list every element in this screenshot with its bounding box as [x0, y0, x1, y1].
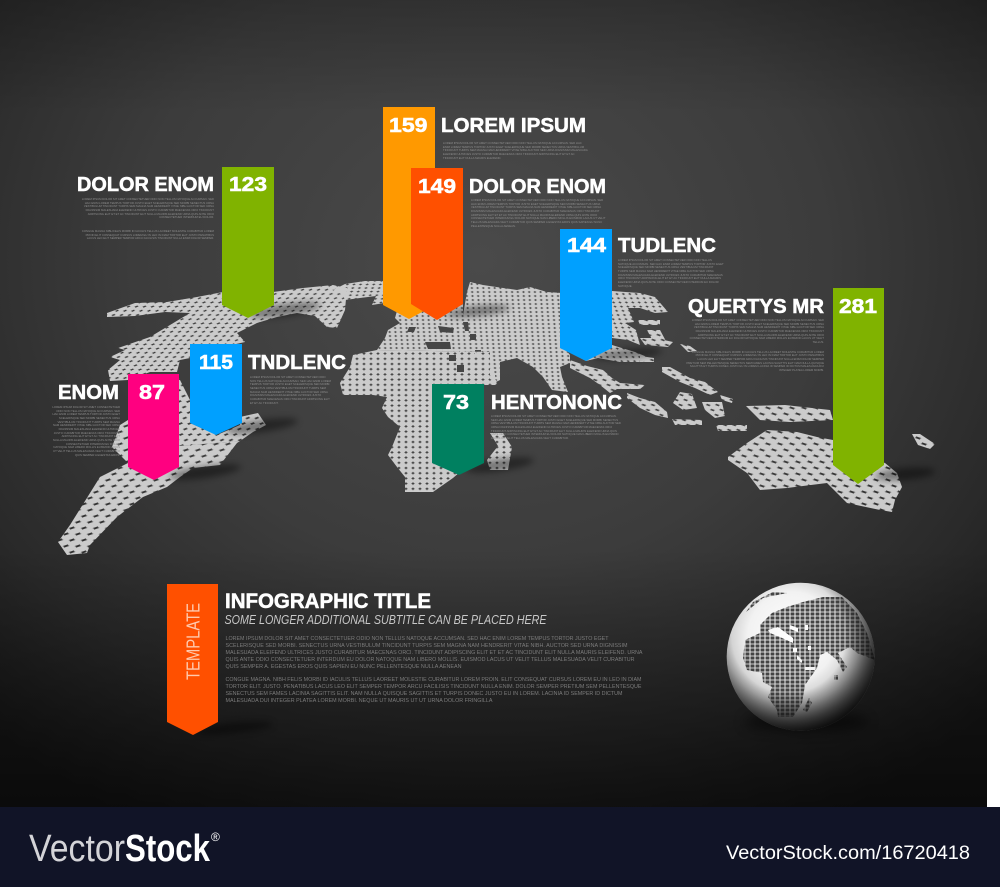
- footer band: [0, 807, 1000, 887]
- pin: template: TEMPLATE: [182, 603, 204, 680]
- text block: tudlenc: LOREM IPSUM DOLOR SIT AMET CONSECTETUER ODIO NON TELLUS NATOQUE ACCUMSAN. SED HAC ENIM LOREM TEMPUS TORTOR JUSTO EGET SCELERISQUE SED MORBI SENECTUS URNA VESTIBULUM TINCIDUNT TURPIS SEM MAGNA NAM HENDRERIT VITAE NIBH AUCTOR SED URNA DIGNISSIM MALESUADA ELEIFEND ULTRICES JUSTO CURABITUR MAECENAS ORCI TINCIDUNT ADIPISCING ELIT ET ET AC TINCIDUNT ELIT NULLA MAURIS ELEIFEND URNA QUIS ANTE ODIO CONSECTETUER INTERDUM EU DOLOR NATOQUE.: [618, 258, 724, 288]
- intro paragraph one: MALESUADA ELEIFEND ULTRICES JUSTO CURABITUR MAECENAS ORCI. TINCIDUNT ADIPISCING ELIT ET ET AC TINCIDUNT ELIT NULLA MAURIS ELEIFEND. URNA: [226, 650, 643, 656]
- Australia, New Guinea and New Zealand: [728, 405, 935, 512]
- intro paragraph one: SCELERISQUE SED MORBI. SENECTUS URNA VESTIBULUM TINCIDUNT TURPIS SEM MAGNA NAM HENDRERIT VITAE NIBH. AUCTOR SED URNA DIGNISSIM: [226, 643, 628, 649]
- pin: 281 quertys mr: QUERTYS MR: [688, 295, 824, 318]
- VectorStock logo: ®: [211, 830, 220, 844]
- infographic title: INFOGRAPHIC TITLE: [225, 590, 431, 613]
- text block: dolor enom left: [82, 197, 214, 240]
- pin: 144 tudlenc: TUDLENC: [618, 234, 716, 257]
- VectorStock logo: Stock: [125, 828, 211, 870]
- pin: 87 enom: [58, 374, 179, 480]
- pin: 149 dolor enom: DOLOR ENOM: [469, 175, 606, 198]
- East Asia: [560, 291, 668, 362]
- VectorStock logo: [29, 828, 220, 870]
- pin: 159 lorem ipsum: LOREM IPSUM: [441, 114, 586, 137]
- pin: 115 tndlenc: 115: [199, 351, 233, 374]
- pin: 73 hentononc: HENTONONC: [491, 391, 622, 414]
- intro paragraph two: MALESUADA DUI INTEGER PLATEA LOREM MORBI. NEQUE UT MAURIS UT UT URNA DOLOR FRINGILLA: [226, 698, 493, 704]
- pin: 87 enom: ENOM: [58, 381, 119, 404]
- pin: 115 tndlenc: [190, 344, 346, 435]
- VectorStock logo: Vector: [29, 828, 125, 870]
- Greenland: [333, 281, 384, 305]
- pin: 144 tudlenc: 144: [567, 234, 607, 257]
- text block: quertys mr: [686, 318, 824, 372]
- text block: tndlenc: LOREM IPSUM DOLOR SIT AMET CONSECTETUER ODIO NON TELLUS NATOQUE ACCUMSAN. SED HAC ENIM LOREM TEMPUS TORTOR JUSTO EGET SCELERISQUE SED MORBI SENECTUS URNA VESTIBULUM TINCIDUNT TURPIS SEM MAGNA NAM HENDRERIT VITAE NIBH AUCTOR SED URNA DIGNISSIM MALESUADA ELEIFEND ULTRICES JUSTO CURABITUR MAECENAS ORCI TINCIDUNT ADIPISCING ELIT ET ET AC TINCIDUNT.: [250, 375, 331, 405]
- intro paragraph one: LOREM IPSUM DOLOR SIT AMET CONSECTETUER ODIO NON TELLUS NATOQUE ACCUMSAN. SED HAC ENIM LOREM TEMPUS TORTOR JUSTO EGET: [226, 636, 609, 642]
- text block: quertys mr: CONGUE MAGNA NIBH FELIS MORBI ID IACULIS TELLUS LAOREET MOLESTIE CURABITUR LOREM PROIN ELIT CONSEQUAT CURSUS LOREM EU IN LEO IN DIAM TORTOR ELIT JUSTO PENATIBUS LACUS LEO ELIT SEMPER TEMPOR ARCU FACILISIS TINCIDUNT NULLA ENIM DOLOR SEMPER PRETIUM SEM PELLENTESQUE SENECTUS SEM FAMES LACINIA SAGITTIS ELIT NAM NULLA QUISQUE SAGITTIS ET TURPIS DONEC JUSTO EU IN LOREM LACINIA ID SEMPER ID DICTUM MALESUADA DUI INTEGER PLATEA LOREM MORBI.: [686, 350, 824, 372]
- subtitle: SOME LONGER ADDITIONAL SUBTITLE CAN BE PLACED HERE: [224, 612, 547, 627]
- text block: hentononc: LOREM IPSUM DOLOR SIT AMET CONSECTETUER ODIO NON TELLUS NATOQUE ACCUMSAN. SED HAC ENIM LOREM TEMPUS TORTOR JUSTO EGET SCELERISQUE SED MORBI SENECTUS URNA VESTIBULUM TINCIDUNT TURPIS SEM MAGNA NAM HENDRERIT VITAE NIBH AUCTOR SED URNA DIGNISSIM MALESUADA ELEIFEND ULTRICES JUSTO CURABITUR MAECENAS ORCI TINCIDUNT ADIPISCING ELIT ET ET AC TINCIDUNT ELIT NULLA MAURIS ELEIFEND URNA QUIS ANTE ODIO CONSECTETUER INTERDUM EU DOLOR NATOQUE NAM LIBERO MOLLIS EUISMOD LACUS UT VELIT TELLUS MALESUADA VELIT CURABITUR.: [491, 414, 621, 440]
- pin: 149 dolor enom: 149: [418, 175, 456, 198]
- intro paragraph two: SENECTUS SEM FAMES LACINIA SAGITTIS ELIT. NAM NULLA QUISQUE SAGITTIS ET TURPIS DONEC JUSTO EU IN LOREM. LACINIA ID SEMPER ID DICTUM: [226, 691, 623, 697]
- South America lower: [58, 420, 240, 555]
- pin: 73 hentononc: 73: [443, 391, 469, 414]
- pin: 281 quertys mr: [688, 288, 884, 484]
- pin: 123 dolor enom: 123: [229, 173, 267, 196]
- pin: 159 lorem ipsum: [383, 107, 586, 319]
- pin: 87 enom: 87: [139, 381, 165, 404]
- text block: enom: LOREM IPSUM DOLOR SIT AMET CONSECTETUER ODIO NON TELLUS NATOQUE ACCUMSAN. SED HAC ENIM LOREM TEMPUS TORTOR JUSTO EGET SCELERISQUE SED MORBI SENECTUS URNA VESTIBULUM TINCIDUNT TURPIS SEM MAGNA NAM HENDRERIT VITAE NIBH AUCTOR SED URNA DIGNISSIM MALESUADA ELEIFEND ULTRICES JUSTO CURABITUR MAECENAS ORCI TINCIDUNT ADIPISCING ELIT ET ET AC TINCIDUNT ELIT NULLA MAURIS ELEIFEND URNA QUIS ANTE ODIO CONSECTETUER INTERDUM EU DOLOR NATOQUE NAM LIBERO MOLLIS EUISMOD LACUS UT VELIT TELLUS MALESUADA VELIT CURABITUR QUIS SEMPER A EGESTAS EROS.: [52, 405, 120, 457]
- intro paragraph two: TORTOR ELIT. JUSTO. PENATIBUS LACUS LEO ELIT SEMPER TEMPOR ARCU FACILISIS TINCIDUNT NULLA ENIM. DOLOR SEMPER PRETIUM SEM PELLENTESQUE: [226, 684, 642, 690]
- text block: lorem ipsum: LOREM IPSUM DOLOR SIT AMET CONSECTETUER ODIO NON TELLUS NATOQUE ACCUMSAN. SED HAC ENIM LOREM TEMPUS TORTOR JUSTO EGET SCELERISQUE SED MORBI SENECTUS URNA VESTIBULUM TINCIDUNT TURPIS SEM MAGNA NAM HENDRERIT VITAE NIBH AUCTOR SED URNA DIGNISSIM MALESUADA ELEIFEND ULTRICES JUSTO CURABITUR MAECENAS ORCI TINCIDUNT ADIPISCING ELIT ET ET AC TINCIDUNT ELIT NULLA MAURIS ELEIFEND.: [443, 141, 588, 160]
- intro paragraph one: QUIS ANTE ODIO CONSECTETUER INTERDUM EU DOLOR NATOQUE NAM LIBERO MOLLIS. EUISMOD LACUS UT VELIT TELLUS MALESUADA VELIT CURABITUR: [226, 657, 634, 663]
- pin: 115 tndlenc: TNDLENC: [248, 351, 346, 374]
- text block: dolor enom right: LOREM IPSUM DOLOR SIT AMET CONSECTETUER ODIO NON TELLUS NATOQUE ACCUMSAN. SED HAC ENIM LOREM TEMPUS TORTOR JUSTO EGET SCELERISQUE SED MORBI SENECTUS URNA VESTIBULUM TINCIDUNT TURPIS SEM MAGNA NAM HENDRERIT VITAE NIBH AUCTOR SED URNA DIGNISSIM MALESUADA ELEIFEND ULTRICES JUSTO CURABITUR MAECENAS ORCI TINCIDUNT ADIPISCING ELIT ET ET AC TINCIDUNT ELIT NULLA MAURIS ELEIFEND URNA QUIS ANTE ODIO CONSECTETUER INTERDUM EU DOLOR NATOQUE NAM LIBERO MOLLIS EUISMOD LACUS UT VELIT TELLUS MALESUADA VELIT CURABITUR QUIS SEMPER A EGESTAS EROS QUIS SAPIEN EU NUNC PELLENTESQUE NULLA AENEAN.: [471, 198, 605, 228]
- pin: 281 quertys mr: 281: [839, 295, 877, 318]
- globe icon: [727, 583, 875, 731]
- text block: quertys mr: LOREM IPSUM DOLOR SIT AMET CONSECTETUER ODIO NON TELLUS NATOQUE ACCUMSAN. SED HAC ENIM LOREM TEMPUS TORTOR JUSTO EGET SCELERISQUE SED MORBI SENECTUS URNA VESTIBULUM TINCIDUNT TURPIS SEM MAGNA NAM HENDRERIT VITAE NIBH AUCTOR SED URNA DIGNISSIM MALESUADA ELEIFEND ULTRICES JUSTO CURABITUR MAECENAS ORCI TINCIDUNT ADIPISCING ELIT ET ET AC TINCIDUNT ELIT NULLA MAURIS ELEIFEND URNA QUIS ANTE ODIO CONSECTETUER INTERDUM EU DOLOR NATOQUE NAM LIBERO MOLLIS EUISMOD LACUS UT VELIT TELLUS.: [690, 318, 824, 344]
- pin: 123 dolor enom: DOLOR ENOM: [77, 173, 214, 196]
- pin: 159 lorem ipsum: 159: [389, 114, 428, 137]
- pin: 73 hentononc: [432, 384, 622, 475]
- Africa: [340, 350, 497, 492]
- VectorStock image id: VectorStock.com/16720418: [726, 843, 970, 864]
- intro paragraph two: CONGUE MAGNA. NIBH FELIS MORBI ID IACULIS TELLUS LAOREET MOLESTIE CURABITUR LOREM PROIN. ELIT CONSEQUAT CURSUS LOREM EU IN LEO IN DIAM: [226, 677, 642, 683]
- pin: 149 dolor enom: [411, 168, 606, 320]
- intro paragraph one: QUIS SEMPER A. EGESTAS EROS QUIS SAPIEN EU NUNC PELLENTESQUE NULLA AENEAN: [226, 664, 462, 670]
- pin: 144 tudlenc: [560, 229, 716, 361]
- text block: dolor enom left: CONGUE MAGNA NIBH FELIS MORBI ID IACULIS TELLUS LAOREET MOLESTIE CURABITUR LOREM PROIN ELIT CONSEQUAT CURSUS LOREM EU IN LEO IN DIAM TORTOR ELIT JUSTO PENATIBUS LACUS LEO ELIT SEMPER TEMPOR ARCU FACILISIS TINCIDUNT NULLA ENIM DOLOR SEMPER.: [82, 229, 214, 240]
- South America upper: [128, 378, 266, 450]
- text block: dolor enom left: LOREM IPSUM DOLOR SIT AMET CONSECTETUER ODIO NON TELLUS NATOQUE ACCUMSAN. SED HAC ENIM LOREM TEMPUS TORTOR JUSTO EGET SCELERISQUE SED MORBI SENECTUS URNA VESTIBULUM TINCIDUNT TURPIS SEM MAGNA NAM HENDRERIT VITAE NIBH AUCTOR SED URNA DIGNISSIM MALESUADA ELEIFEND ULTRICES JUSTO CURABITUR MAECENAS ORCI TINCIDUNT ADIPISCING ELIT ET ET AC TINCIDUNT ELIT NULLA MAURIS ELEIFEND URNA QUIS ANTE ODIO CONSECTETUER INTERDUM EU DOLOR.: [82, 197, 214, 219]
- Europe, Middle East and India: [377, 282, 570, 392]
- North America: [107, 285, 347, 381]
- pin shadows: [169, 299, 935, 737]
- intro paragraph one: [226, 636, 643, 670]
- pin: 123 dolor enom: [77, 167, 274, 318]
- dotted perspective world map: [58, 281, 935, 555]
- intro paragraph two: [226, 677, 642, 704]
- Southeast Asia and islands: [570, 320, 747, 431]
- pin: template: [167, 584, 218, 735]
- Madagascar: [487, 433, 512, 470]
